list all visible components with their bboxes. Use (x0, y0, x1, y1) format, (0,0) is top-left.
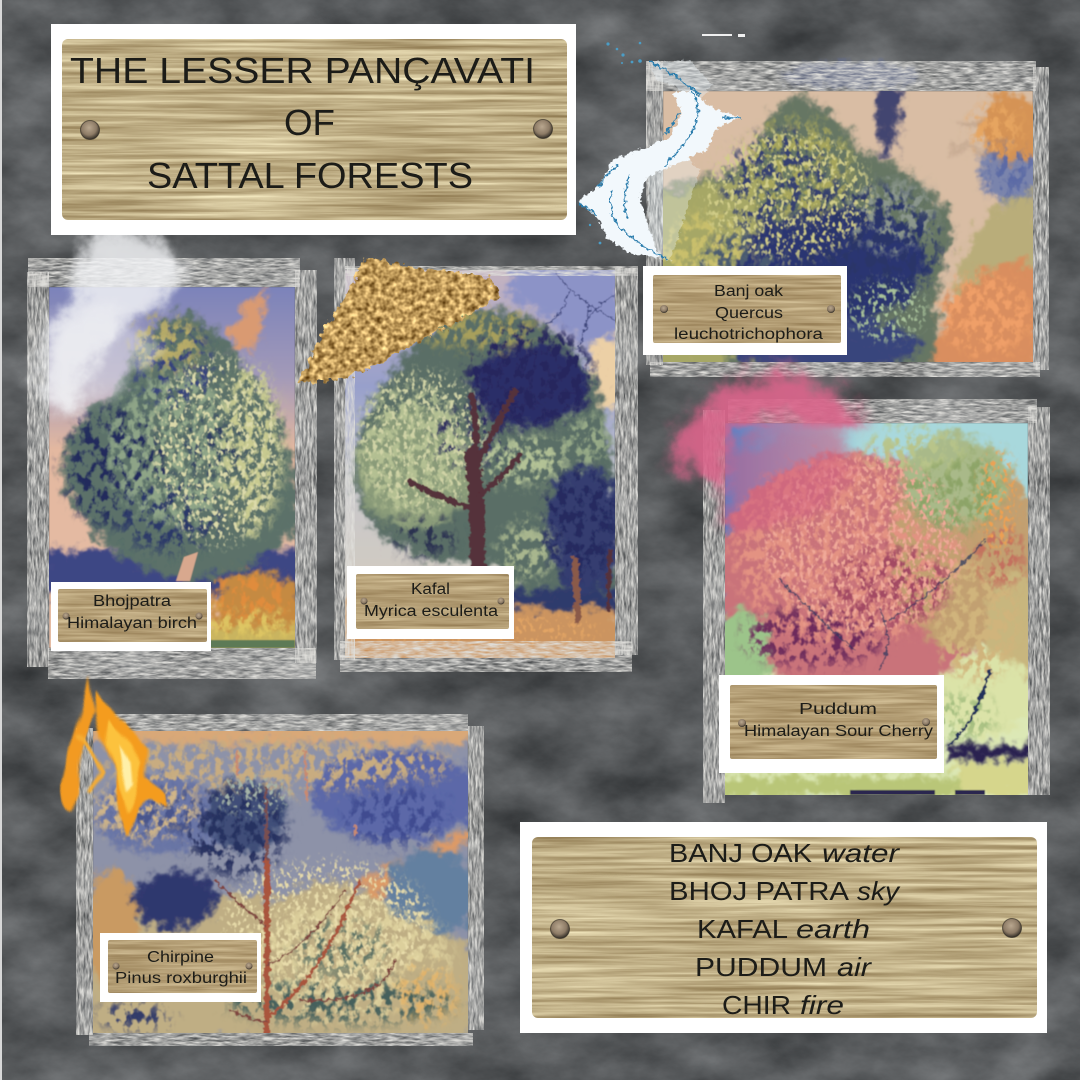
label: Chirpine (100, 933, 261, 1002)
title text (70, 50, 535, 196)
tape strips (76, 714, 484, 1046)
label: Kafal: Kafal (411, 581, 450, 598)
legend text: KAFAL (697, 914, 788, 944)
label: Bhojpatra (51, 582, 211, 651)
label: Kafal: Myrica esculenta (364, 603, 498, 620)
treetop showing through tape (780, 62, 920, 90)
title text: OF (284, 102, 335, 143)
legend text: PUDDUM (695, 952, 827, 982)
nails (550, 918, 1022, 938)
nails (80, 120, 552, 140)
legend text: BHOJ PATRA (669, 876, 850, 906)
painting: Puddum tree (725, 423, 1028, 795)
tape strips (646, 61, 1049, 377)
panel: Puddum painting (703, 399, 1050, 805)
painting: Chir pine (93, 731, 468, 1033)
painting: Kafal tree (340, 265, 623, 662)
title plaque (51, 24, 576, 235)
legend text (669, 838, 901, 1020)
icon: white smoke for sky (37, 212, 182, 411)
icon: fire (60, 672, 170, 835)
legend text: CHIR (722, 990, 791, 1020)
legend text: sky (857, 876, 901, 906)
legend text: fire (800, 990, 844, 1020)
label: Banj oak: Banj oak (714, 283, 783, 300)
legend text: air (837, 952, 873, 982)
panel: Chirpine painting (76, 714, 484, 1046)
tape strips (703, 399, 1050, 803)
label: Bhojpatra: Himalayan birch (67, 615, 197, 632)
icon: water splash (577, 42, 742, 262)
label: Chirpine: Pinus roxburghii (115, 970, 247, 987)
tape strips (27, 258, 317, 679)
label: Puddum (719, 675, 944, 773)
legend text: earth (796, 914, 870, 944)
panel: Banj oak painting (646, 61, 1049, 377)
icon: pink smoke for air (676, 371, 860, 530)
legend text: water (822, 838, 901, 868)
label: Banj oak: leuchotrichophora (674, 326, 823, 343)
painting: Banj oak tree (663, 91, 1033, 362)
title text: SATTAL FORESTS (147, 155, 473, 196)
label: Banj oak: Quercus (715, 305, 783, 322)
label: Puddum: Himalayan Sour Cherry (744, 723, 933, 740)
label: Banj oak (643, 266, 847, 355)
legend plaque: tree and element pairs (520, 822, 1047, 1033)
label: Bhojpatra: Bhojpatra (93, 593, 171, 610)
label: Kafal (347, 566, 514, 639)
icon: earth grain mound (298, 257, 500, 383)
panel: Kafal painting (334, 258, 638, 672)
panel: Bhojpatra painting (27, 258, 317, 679)
label: Puddum: Puddum (799, 701, 877, 718)
label: Chirpine: Chirpine (147, 949, 214, 966)
tape strips (334, 258, 638, 672)
painting: Bhojpatra tree (49, 287, 295, 648)
title text: THE LESSER PANÇAVATI (70, 50, 535, 91)
legend text: BANJ OAK (669, 838, 813, 868)
